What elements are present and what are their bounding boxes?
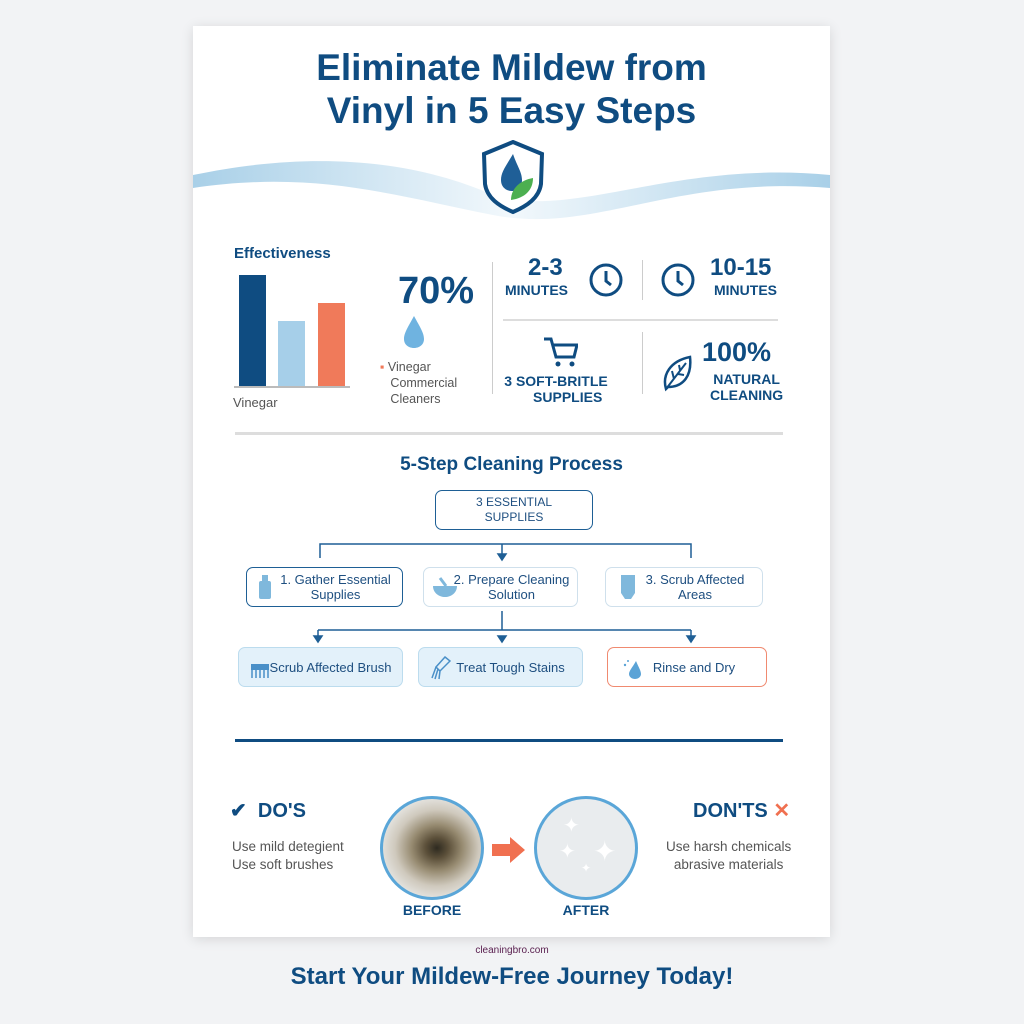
stat: supplies: 3 SOFT-BRITLE <box>504 373 608 389</box>
flowchart: 3 ESSENTIAL <box>476 495 552 509</box>
stat: supplies <box>504 338 608 405</box>
stat: 100% natural: 100% <box>702 337 771 367</box>
flowchart: SUPPLIES <box>485 510 543 524</box>
step 5: Treat Tough Stains <box>456 660 565 674</box>
step 3: 3. Scrub Affected <box>646 572 744 587</box>
stat: 70%: Cleaners <box>390 392 440 406</box>
after image: ✦ <box>581 861 591 875</box>
after image <box>534 796 638 918</box>
stat: 10-15 minutes <box>662 254 777 298</box>
step 4: Scrub Affected Brush <box>270 660 391 674</box>
source: cleaningbro.com <box>475 945 549 956</box>
title <box>316 47 707 131</box>
do's <box>230 800 344 872</box>
process heading: 5-Step Cleaning Process <box>400 454 623 475</box>
flowchart <box>238 490 767 687</box>
divider <box>235 739 783 742</box>
stat: 70%: ▪ Vinegar <box>380 360 431 374</box>
after image: ✦ <box>563 815 580 837</box>
stat: 70%: 70% <box>398 270 474 312</box>
step 1: Supplies <box>311 587 360 602</box>
wave banner with shield icon <box>193 140 830 219</box>
step 2 <box>423 567 578 607</box>
don'ts: DON'TS ✕ <box>693 800 790 822</box>
stat: 2-3 minutes: 2-3 <box>528 254 563 281</box>
divider <box>235 432 783 435</box>
stat: 100% natural: CLEANING <box>710 387 783 403</box>
do's: Use mild detegient <box>232 839 344 854</box>
step 6 <box>607 647 767 687</box>
step 3: Areas <box>678 587 712 602</box>
step 1 <box>246 567 403 607</box>
arrow <box>492 837 525 863</box>
footer tagline: Start Your Mildew-Free Journey Today! <box>291 963 733 990</box>
effectiveness chart <box>233 245 350 410</box>
don'ts <box>666 800 791 872</box>
stat: supplies: SUPPLIES <box>533 389 602 405</box>
before image: BEFORE <box>403 902 461 918</box>
before image <box>380 796 484 918</box>
stat: 100% natural <box>664 337 783 403</box>
step 6: Rinse and Dry <box>653 660 735 674</box>
do's: Use soft brushes <box>232 857 333 872</box>
don'ts: Use harsh chemicals <box>666 839 791 854</box>
don'ts: abrasive materials <box>674 857 783 872</box>
step 3 <box>605 567 763 607</box>
stat: 2-3 minutes <box>505 254 622 298</box>
dividers <box>492 262 493 394</box>
after image: AFTER <box>563 902 609 918</box>
stat: 70%: Commercial <box>390 376 457 390</box>
step 4 <box>238 647 403 687</box>
stat: 100% natural: NATURAL <box>713 371 780 387</box>
card <box>193 26 830 937</box>
title: Eliminate Mildew from <box>316 47 707 88</box>
step 2: 2. Prepare Cleaning <box>454 572 569 587</box>
after image: ✦ <box>593 836 616 867</box>
stat: 10-15 minutes: MINUTES <box>714 282 777 298</box>
step 1: 1. Gather Essential <box>280 572 391 587</box>
stat: 70% <box>380 270 474 406</box>
do's: ✔ DO'S <box>230 800 306 822</box>
effectiveness chart: Effectiveness <box>234 245 331 262</box>
step 2: Solution <box>488 587 535 602</box>
stat: 2-3 minutes: MINUTES <box>505 282 568 298</box>
title: Vinyl in 5 Easy Steps <box>327 90 696 131</box>
stat: 10-15 minutes: 10-15 <box>710 254 771 281</box>
after image: ✦ <box>559 841 576 863</box>
effectiveness chart: Vinegar <box>233 395 278 410</box>
step 5 <box>418 647 583 687</box>
